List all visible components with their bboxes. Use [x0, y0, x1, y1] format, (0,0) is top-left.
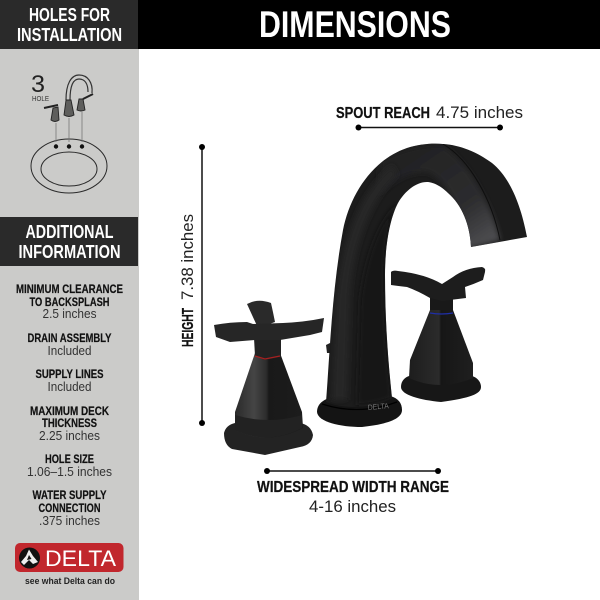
- heading: additional information: ADDITIONAL: [26, 221, 114, 242]
- text: minimum clearance: TO BACKSPLASH: [30, 297, 110, 309]
- icon: 3 hole sink diagram: [31, 71, 107, 193]
- faucet: left cross handle: [214, 301, 324, 455]
- heading: holes for installation: [0, 0, 138, 49]
- text: drain assembly: Included: [48, 344, 92, 358]
- text: maximum deck thickness: MAXIMUM DECK: [30, 406, 110, 418]
- dimension: spout reach: [336, 104, 523, 130]
- icon: 3 hole sink diagram: HOLE: [32, 94, 49, 103]
- text: maximum deck thickness: [30, 406, 110, 443]
- faucet: right cross handle: [391, 267, 485, 402]
- heading: holes for installation: HOLES FOR: [29, 4, 110, 25]
- text: water supply connection: CONNECTION: [38, 503, 100, 515]
- dimension: widespread width range: [257, 468, 449, 516]
- text: drain assembly: DRAIN ASSEMBLY: [28, 333, 112, 345]
- logo: delta: [15, 543, 124, 586]
- heading: additional information: [0, 217, 138, 266]
- text: minimum clearance: [16, 284, 123, 321]
- dimension: height: 7.38 inches: [179, 214, 197, 300]
- dimension: height: [179, 144, 205, 426]
- icon: 3 hole sink diagram: 3: [31, 71, 45, 98]
- text: minimum clearance: MINIMUM CLEARANCE: [16, 284, 123, 296]
- faucet: center spout: [317, 144, 527, 427]
- dimension: spout reach: 4.75 inches: [436, 104, 523, 122]
- text: water supply connection: .375 inches: [39, 514, 100, 528]
- text: supply lines: [36, 369, 104, 394]
- text: hole size: 1.06–1.5 inches: [27, 465, 112, 479]
- heading: additional information: INFORMATION: [18, 241, 120, 262]
- label: delta engraving: DELTA: [367, 401, 389, 412]
- text: minimum clearance: 2.5 inches: [42, 307, 96, 321]
- heading: holes for installation: INSTALLATION: [17, 24, 122, 45]
- text: drain assembly: [28, 333, 112, 358]
- dimension: widespread width range: WIDESPREAD WIDTH RANGE: [257, 479, 449, 496]
- panel: sidebar: [0, 49, 139, 600]
- title: dimensions: DIMENSIONS: [259, 4, 451, 45]
- header band: dimensions: [138, 0, 600, 49]
- text: maximum deck thickness: THICKNESS: [42, 418, 97, 430]
- dimension: height: HEIGHT: [180, 308, 197, 347]
- text: water supply connection: [32, 490, 107, 528]
- text: maximum deck thickness: 2.25 inches: [39, 429, 100, 443]
- text: hole size: HOLE SIZE: [45, 454, 94, 466]
- logo: delta: see what Delta can do: [25, 576, 115, 586]
- text: supply lines: SUPPLY LINES: [36, 369, 104, 381]
- dimension: spout reach: SPOUT REACH: [336, 105, 430, 122]
- text: hole size: [27, 454, 112, 479]
- logo: delta: DELTA: [45, 546, 116, 571]
- dimension: widespread width range: 4-16 inches: [309, 498, 396, 516]
- text: supply lines: Included: [48, 380, 92, 394]
- text: water supply connection: WATER SUPPLY: [32, 490, 107, 502]
